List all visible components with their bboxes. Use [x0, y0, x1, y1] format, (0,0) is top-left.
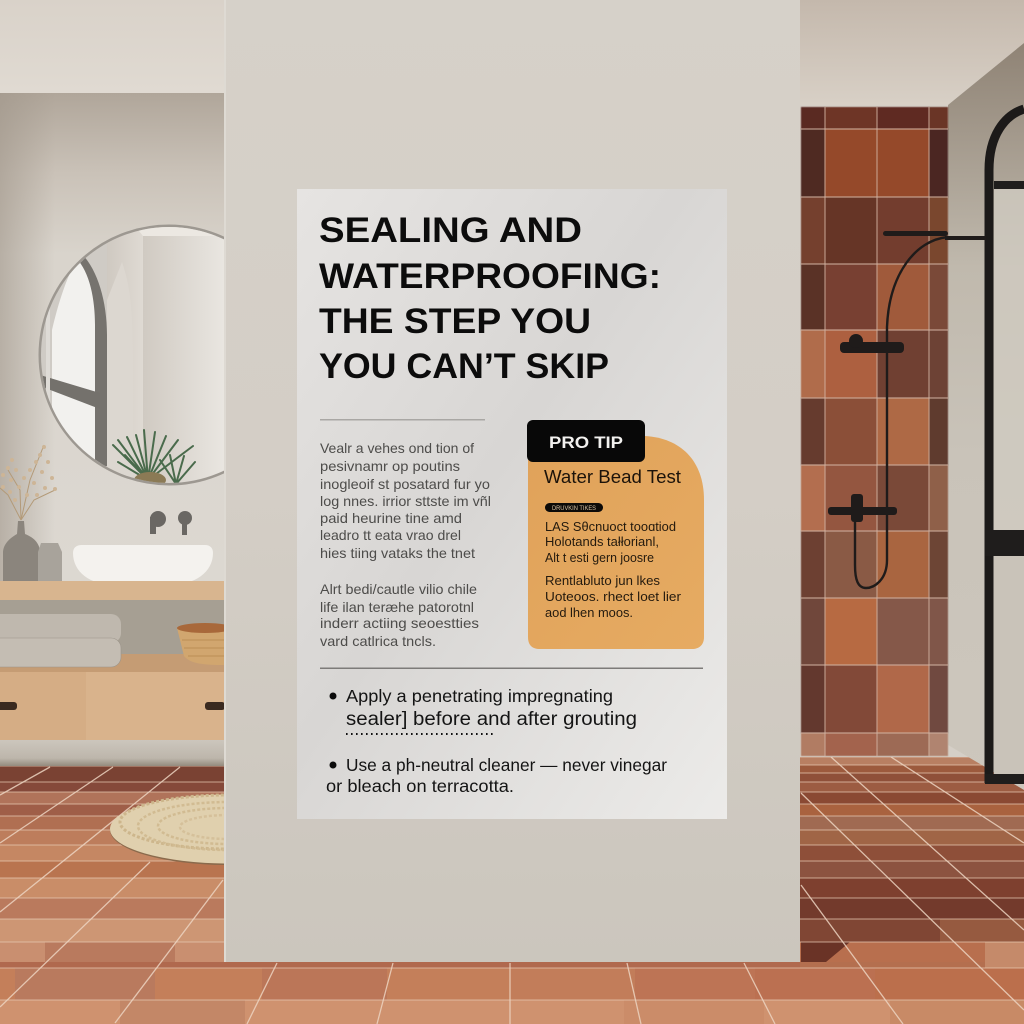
vase — [3, 521, 40, 581]
pro tip tab — [527, 420, 645, 462]
bottom floor rows — [0, 962, 1024, 1024]
towels — [0, 614, 121, 667]
card text: LAS Sθcnuoct tooɑtiod — [545, 519, 676, 534]
pill label: DRUVKIN TIKES — [552, 506, 596, 512]
divider short — [320, 419, 485, 420]
mirror window — [41, 243, 107, 467]
card text: Holotands tałłorianl, — [545, 534, 659, 549]
shower set — [828, 231, 986, 588]
basket — [177, 623, 233, 665]
body text: pesivnamr op poutins — [320, 458, 460, 474]
dried flowers — [0, 445, 57, 520]
title: YOU CAN’T SKIP — [319, 347, 609, 386]
card heading: Water Bead Test — [544, 467, 681, 487]
left room ceiling — [0, 0, 224, 93]
title — [319, 211, 661, 386]
terracotta wall tiles — [801, 107, 948, 756]
pro tip tab: PRO TIP — [549, 433, 623, 452]
bullet two — [326, 755, 667, 796]
card text: Rentlabluto jun lkes — [545, 573, 660, 588]
bullet one: Apply a penetrating impregnating — [346, 686, 613, 706]
left floor rows — [0, 766, 224, 968]
back recess — [0, 600, 224, 655]
body text: Alrt bedi/cautle vilio chile — [320, 581, 477, 597]
bottle — [38, 543, 62, 581]
card text: Uoteoos. rhect loet lier — [545, 589, 682, 604]
body text — [320, 440, 491, 649]
divider long — [320, 668, 703, 669]
floor grout — [0, 757, 1024, 1000]
baseboard wall — [0, 740, 224, 766]
mirror — [38, 224, 224, 486]
pill label — [545, 503, 603, 512]
card text: aod lhen moos. — [545, 605, 633, 620]
title: SEALING AND — [319, 211, 582, 250]
title: THE STEP YOU — [319, 302, 591, 341]
faucet — [150, 511, 192, 535]
vanity shelf — [0, 581, 224, 600]
central wall — [224, 0, 800, 962]
bullet two: or bleach on terracotta. — [326, 776, 514, 796]
bullet two: Use a ph-neutral cleaner — never vinegar — [346, 755, 667, 775]
bullet list — [326, 686, 667, 796]
terracotta floor — [0, 757, 1024, 1024]
drawers — [0, 672, 225, 740]
body text: inogleoif st posatard fur yo — [320, 476, 490, 492]
body text: Vealr a vehes ond tion of — [320, 440, 474, 456]
right floor rows — [800, 757, 1024, 968]
title: WATERPROOFING: — [319, 257, 661, 296]
card text: Alt t esti gern joosre — [545, 550, 654, 565]
bullet one: sealer] before and after grouting — [346, 709, 637, 730]
left room wall — [0, 93, 224, 766]
card text — [545, 519, 682, 620]
right side wall — [948, 43, 1024, 790]
lower shelf — [0, 654, 224, 672]
body text: life ilan teræhe patorotnl — [320, 599, 474, 615]
body text: inderr actiing seoestties — [320, 615, 479, 631]
body text: hies tiing vataks the tnet — [320, 545, 475, 561]
body text: vard catlrica tncls. — [320, 633, 436, 649]
bullet one — [330, 686, 637, 734]
mirror plant — [113, 430, 195, 484]
shower door frame — [985, 109, 1024, 784]
basin — [73, 545, 213, 585]
pro tip card — [527, 420, 704, 649]
poster — [297, 189, 727, 819]
woven rug — [110, 794, 224, 865]
right ceiling — [800, 0, 1024, 105]
body text: paid heurine tine amd — [320, 510, 462, 526]
body text: leadro tt eata vrao drel — [320, 527, 461, 543]
body text: log nnes. irrior sttste im vñl — [320, 493, 491, 509]
